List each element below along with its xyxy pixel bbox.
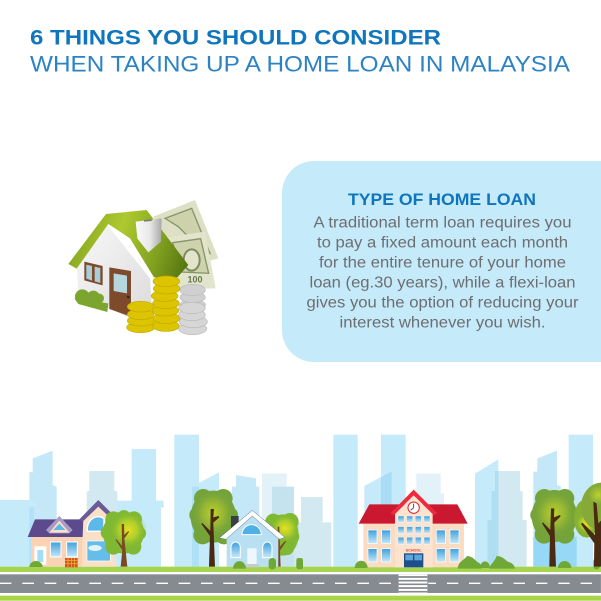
panel body text: to pay a fixed amount each month bbox=[317, 234, 568, 252]
side windows bbox=[368, 530, 459, 562]
bush bbox=[29, 561, 43, 567]
panel body text: interest whenever you wish. bbox=[340, 314, 546, 332]
yellow-green tree bbox=[101, 510, 147, 567]
roof gable bbox=[46, 516, 73, 533]
blue house bbox=[219, 510, 285, 567]
icon: house roof bbox=[68, 210, 188, 277]
door bbox=[247, 548, 257, 564]
scene left: houses and trees bbox=[28, 489, 301, 569]
icon: banknotes bbox=[153, 200, 218, 289]
panel body text: gives you the option of reducing your bbox=[306, 294, 578, 312]
crosswalk bbox=[399, 574, 427, 593]
skyline right bbox=[300, 435, 593, 567]
door bbox=[34, 546, 46, 565]
brick fence bbox=[65, 558, 78, 567]
icon: house walls bbox=[77, 225, 152, 317]
icon: gold coin stack tall bbox=[151, 276, 180, 331]
panel heading: TYPE OF HOME LOAN bbox=[348, 190, 536, 209]
icon: gold coin stack short bbox=[127, 301, 155, 333]
arched window bbox=[87, 517, 104, 531]
school sign: SCHOOL bbox=[406, 549, 422, 553]
purple roof bbox=[28, 519, 83, 537]
clock bbox=[408, 502, 419, 513]
icon: silver coin stack front bbox=[179, 302, 207, 335]
icon: banknotes: 100 bbox=[187, 274, 202, 284]
red roof bbox=[359, 504, 468, 524]
panel body text bbox=[306, 214, 578, 332]
steps bbox=[246, 564, 259, 567]
skyline left bbox=[0, 435, 300, 567]
small tree behind blue house bbox=[265, 513, 300, 567]
lower windows bbox=[50, 542, 61, 557]
icon: silver coin stack back bbox=[180, 284, 205, 310]
icon: house door bbox=[109, 267, 131, 317]
arched windows bbox=[231, 542, 240, 558]
icon: bush bbox=[74, 289, 108, 312]
green tree bbox=[189, 489, 238, 567]
school bbox=[359, 490, 468, 567]
central block bbox=[395, 495, 433, 567]
school door bbox=[404, 553, 423, 567]
white roof bbox=[219, 510, 285, 539]
bushes bbox=[298, 556, 600, 569]
panel body text: loan (eg.30 years), while a flexi-loan bbox=[310, 274, 576, 292]
road dashes bbox=[0, 581, 592, 585]
panel background bbox=[282, 161, 601, 362]
icon: house window bbox=[84, 262, 103, 285]
peach house bbox=[28, 500, 115, 567]
large window bbox=[87, 541, 110, 561]
icon: chimney bbox=[136, 218, 162, 252]
far-right tree bbox=[574, 482, 601, 567]
chimney bbox=[231, 516, 239, 529]
green tree bbox=[530, 489, 579, 567]
road and ground bbox=[0, 567, 601, 601]
panel body text: A traditional term loan requires you bbox=[314, 214, 572, 232]
school body bbox=[363, 523, 464, 567]
title line 2: WHEN TAKING UP A HOME LOAN IN MALAYSIA bbox=[30, 52, 570, 76]
bushes bbox=[233, 558, 301, 569]
house body bbox=[227, 516, 278, 567]
house body bbox=[31, 536, 83, 567]
scene right: school and trees bbox=[298, 482, 601, 569]
attic window bbox=[242, 525, 261, 535]
title bbox=[30, 26, 570, 76]
central gable bbox=[390, 490, 437, 515]
icon: house with money and coins bbox=[68, 200, 218, 335]
panel: type of home loan bbox=[282, 161, 601, 362]
central windows bbox=[398, 516, 430, 544]
title line 1: 6 THINGS YOU SHOULD CONSIDER bbox=[30, 26, 442, 50]
panel body text: for the entire tenure of your home bbox=[319, 254, 566, 272]
